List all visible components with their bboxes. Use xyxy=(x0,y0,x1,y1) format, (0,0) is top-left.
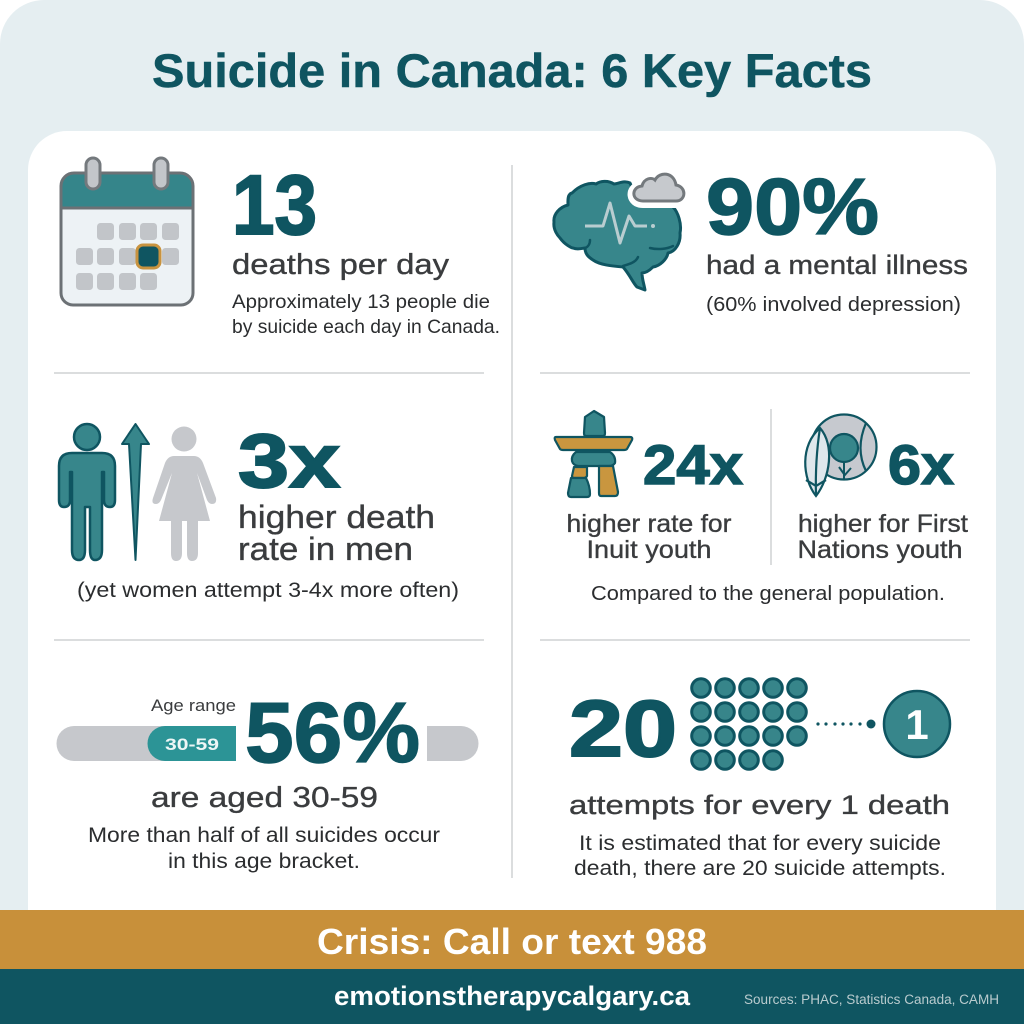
description: in this age bracket. xyxy=(168,850,360,873)
icon: calendar xyxy=(61,158,193,305)
stat: 24x: 24x xyxy=(643,433,743,496)
description: (60% involved depression) xyxy=(706,294,961,316)
label: First Nations youth: higher for First xyxy=(798,510,968,538)
age range bar: 30-59 xyxy=(165,735,219,754)
panel: main card xyxy=(28,131,996,915)
stat: 6x: 6x xyxy=(888,433,954,496)
label: had a mental illness: had a mental illness xyxy=(706,250,968,280)
crisis banner: Crisis: Call or text 988 xyxy=(317,921,707,962)
description: It is estimated that for every suicide xyxy=(579,832,941,855)
icon: up arrow xyxy=(122,424,149,560)
panel: mental illness xyxy=(554,162,968,316)
label: age range: Age range xyxy=(151,696,236,715)
icon: woman xyxy=(152,426,216,561)
crisis banner xyxy=(0,910,1024,969)
panel: Indigenous youth xyxy=(555,411,968,605)
footer bar xyxy=(0,969,1024,1024)
label: are aged 30-59: are aged 30-59 xyxy=(151,782,378,814)
label: higher death rate in men: rate in men xyxy=(238,531,413,567)
label: Inuit youth: Inuit youth xyxy=(586,536,712,564)
dividers xyxy=(54,165,970,878)
stat: 20: 20 xyxy=(569,684,677,773)
description: Approximately 13 people die xyxy=(232,291,490,313)
age range bar xyxy=(56,726,478,761)
label: First Nations youth: Nations youth xyxy=(798,536,962,564)
icon: man xyxy=(59,424,115,560)
panel: higher death rate in men xyxy=(59,419,459,602)
icon: feather and circle xyxy=(805,414,876,496)
icon: circled 1 xyxy=(884,691,950,757)
label: Inuit youth: higher rate for xyxy=(566,510,732,538)
icon: brain with cloud xyxy=(554,170,687,290)
stat: 56%: 56% xyxy=(245,686,420,781)
website: emotionstherapycalgary.ca xyxy=(334,981,691,1011)
dotted connector xyxy=(816,720,876,728)
label: attempts for every 1 death: attempts for every 1 death xyxy=(569,790,950,820)
icon: inukshuk xyxy=(555,411,632,497)
stat: 13: 13 xyxy=(232,158,317,252)
panel: age 30-59 xyxy=(56,686,478,873)
panel: attempts per death xyxy=(569,679,950,880)
description: More than half of all suicides occur xyxy=(88,824,440,847)
description: by suicide each day in Canada. xyxy=(232,316,500,338)
description: death, there are 20 suicide attempts. xyxy=(574,857,946,880)
title: Suicide in Canada: 6 Key Facts xyxy=(152,44,872,97)
label: higher death rate in men: higher death xyxy=(238,499,435,535)
stat: 90%: 90% xyxy=(706,162,879,251)
label: deaths per day: deaths per day xyxy=(232,249,450,281)
stat: 3x: 3x xyxy=(238,419,340,504)
description: (yet women attempt 3-4x more often) xyxy=(77,579,459,602)
description: Compared to the general population. xyxy=(591,583,945,605)
sources: Sources: PHAC, Statistics Canada, CAMH xyxy=(744,992,999,1007)
icon: dot grid of 19 attempts xyxy=(692,679,806,769)
icon: circled 1: 1 xyxy=(905,701,929,748)
panel: deaths per day xyxy=(61,158,500,338)
